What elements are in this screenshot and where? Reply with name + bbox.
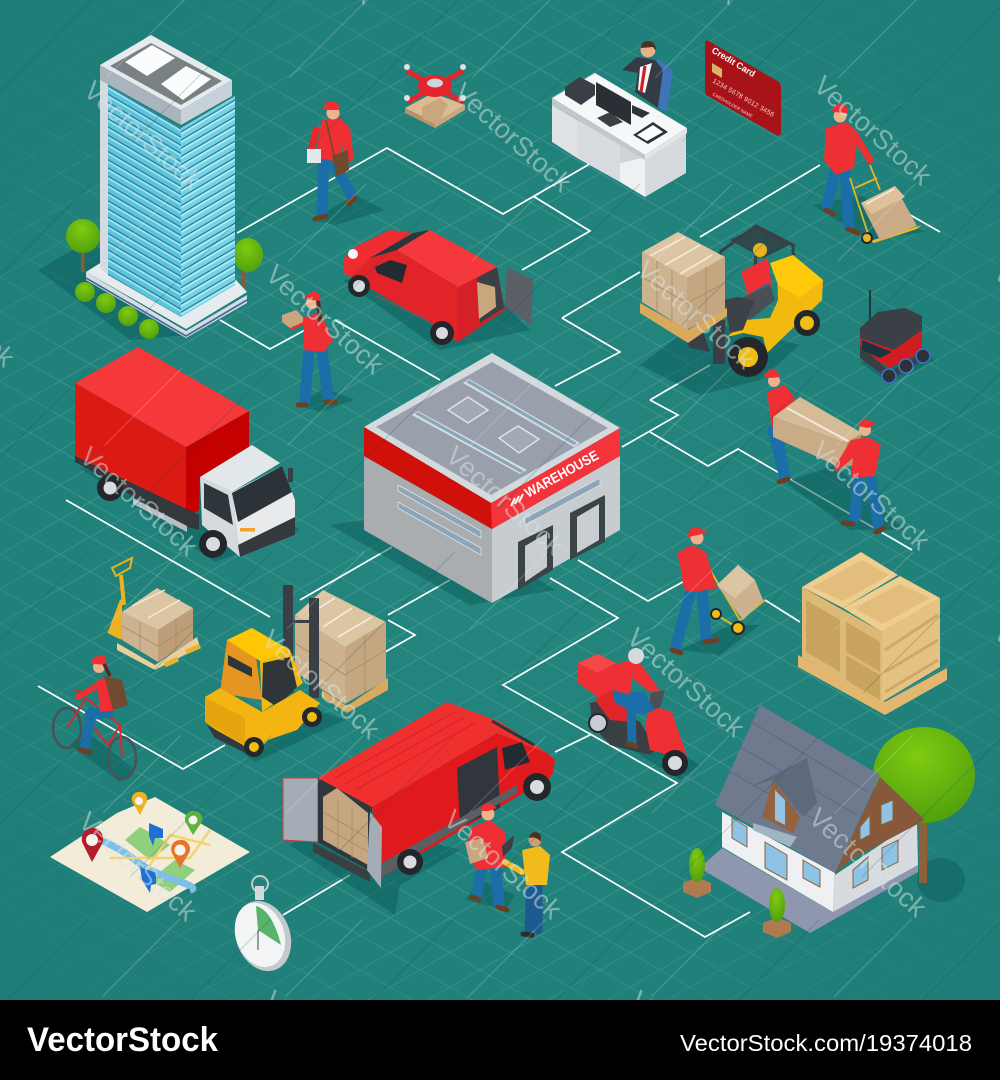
card number: 1234 5678 9012 3456	[711, 78, 775, 119]
delivery scooter	[578, 648, 700, 780]
balcony	[753, 823, 797, 847]
glass facades	[108, 85, 235, 317]
house	[683, 705, 975, 938]
warehouse building	[330, 353, 620, 605]
warehouse sign: WAREHOUSE	[522, 447, 601, 501]
pallet with boxes and pallet jack	[110, 558, 200, 670]
front worker	[834, 420, 884, 532]
white rear column	[100, 65, 108, 275]
truck cab	[200, 445, 295, 557]
van wheels	[523, 773, 551, 801]
shrubs	[75, 282, 159, 339]
van hood	[447, 702, 547, 753]
large red truck	[75, 347, 300, 562]
card name: CARDHOLDER NAME	[712, 92, 754, 119]
woman with parcel	[282, 292, 355, 412]
cargo boxes	[323, 788, 368, 865]
van sliding door	[457, 747, 500, 827]
watermarks: VectorStock	[631, 254, 761, 375]
truck cargo box	[75, 347, 249, 518]
courier with bag	[307, 101, 385, 225]
large red van	[283, 702, 555, 915]
van roof	[318, 702, 497, 807]
watermarks: VectorStock	[73, 806, 203, 927]
tower base	[86, 260, 247, 338]
cyclist	[53, 656, 136, 782]
watermarks: VectorStock	[256, 624, 386, 745]
watermarks: VectorStock	[438, 804, 568, 925]
forklift mast	[283, 585, 319, 698]
loading doors	[518, 495, 605, 590]
watermarks: VectorStock	[440, 440, 570, 561]
hand truck and box	[710, 565, 765, 634]
van bed	[313, 843, 370, 882]
desk tablet	[633, 122, 668, 144]
office desk with manager	[552, 41, 687, 197]
rider	[78, 656, 128, 752]
tree left	[66, 219, 100, 272]
tower roof	[100, 35, 232, 125]
van sill	[382, 785, 517, 877]
red compact van	[343, 230, 533, 350]
tree right	[233, 238, 263, 288]
desk	[552, 73, 687, 197]
monitor	[596, 82, 631, 127]
courier	[465, 803, 515, 910]
van windshield	[492, 721, 534, 745]
scooter wheels	[662, 750, 688, 776]
main roof	[715, 705, 880, 873]
stacked boxes	[295, 590, 388, 713]
forklift boxes	[642, 232, 725, 330]
office tower	[38, 35, 263, 340]
carried box	[773, 397, 862, 468]
truck chassis	[75, 456, 199, 530]
courier handing parcel to customer	[465, 803, 550, 935]
customer	[505, 832, 550, 935]
crates faces	[802, 552, 940, 702]
bicycle	[53, 690, 136, 779]
forklift body	[205, 688, 320, 757]
potted plants	[683, 848, 791, 938]
pallet jack	[110, 558, 132, 638]
forklift mast	[713, 320, 725, 364]
card label: Credit Card	[710, 45, 757, 79]
yellow forklift with pallet	[205, 585, 388, 762]
worker with small hand truck	[672, 527, 765, 655]
watermarks: VectorStock	[803, 802, 933, 923]
watermarks: VectorStock	[260, 259, 390, 380]
forklift wheels	[728, 337, 768, 377]
delivery box	[578, 654, 616, 700]
scooter body	[590, 688, 688, 760]
right rear door	[367, 812, 382, 888]
rear left door	[283, 778, 318, 842]
boxes	[122, 588, 193, 662]
printer	[565, 77, 595, 105]
forklift cage	[720, 226, 795, 285]
footer bar	[0, 1000, 1000, 1080]
truck wheels	[97, 475, 123, 501]
gable	[835, 777, 925, 873]
forklift driver	[741, 243, 772, 320]
windows and door	[732, 800, 898, 888]
rider	[612, 648, 660, 746]
keyboard	[632, 105, 650, 118]
connector lines	[38, 148, 940, 937]
van side	[372, 733, 555, 877]
warehouse walls	[364, 456, 620, 603]
cab window	[502, 742, 530, 770]
dormer	[750, 758, 817, 833]
warehouse red band	[364, 427, 620, 529]
watermarks: VectorStock	[78, 75, 208, 196]
watermarks: VectorStock	[806, 435, 936, 556]
big wooden crates	[798, 552, 947, 715]
crate pallet	[798, 655, 947, 715]
forklift with pallet top right	[640, 226, 823, 395]
stopwatch	[225, 876, 301, 979]
forklift cab	[220, 628, 303, 712]
porch	[703, 848, 918, 933]
credit card	[705, 40, 781, 136]
warehouse roof	[364, 353, 620, 503]
van rear opening	[318, 778, 372, 870]
manager chair	[657, 58, 673, 112]
city map	[50, 792, 250, 912]
forklift pallet	[640, 303, 727, 343]
worker with hand truck	[812, 104, 925, 243]
pallet	[117, 637, 200, 670]
rear worker	[763, 369, 795, 482]
house walls	[722, 812, 918, 912]
manager	[622, 41, 663, 108]
footer brand: VectorStock	[27, 1021, 218, 1059]
forklift body	[727, 255, 823, 353]
delivery robot	[860, 290, 935, 384]
warehouse windows	[398, 478, 600, 555]
watermarks: VectorStock	[74, 441, 204, 562]
tree	[873, 727, 975, 902]
footer image id: VectorStock.com/19374018	[680, 1030, 972, 1056]
watermarks: VectorStock	[808, 70, 938, 191]
watermarks: VectorStock	[621, 622, 751, 743]
map pins	[82, 792, 202, 893]
forklift wheels	[244, 737, 264, 757]
van door	[505, 267, 533, 325]
card chip	[712, 63, 722, 78]
sign logo	[511, 494, 523, 506]
two workers carrying a box	[763, 369, 905, 532]
delivery drone	[404, 64, 466, 128]
watermarks: VectorStock	[448, 77, 578, 198]
